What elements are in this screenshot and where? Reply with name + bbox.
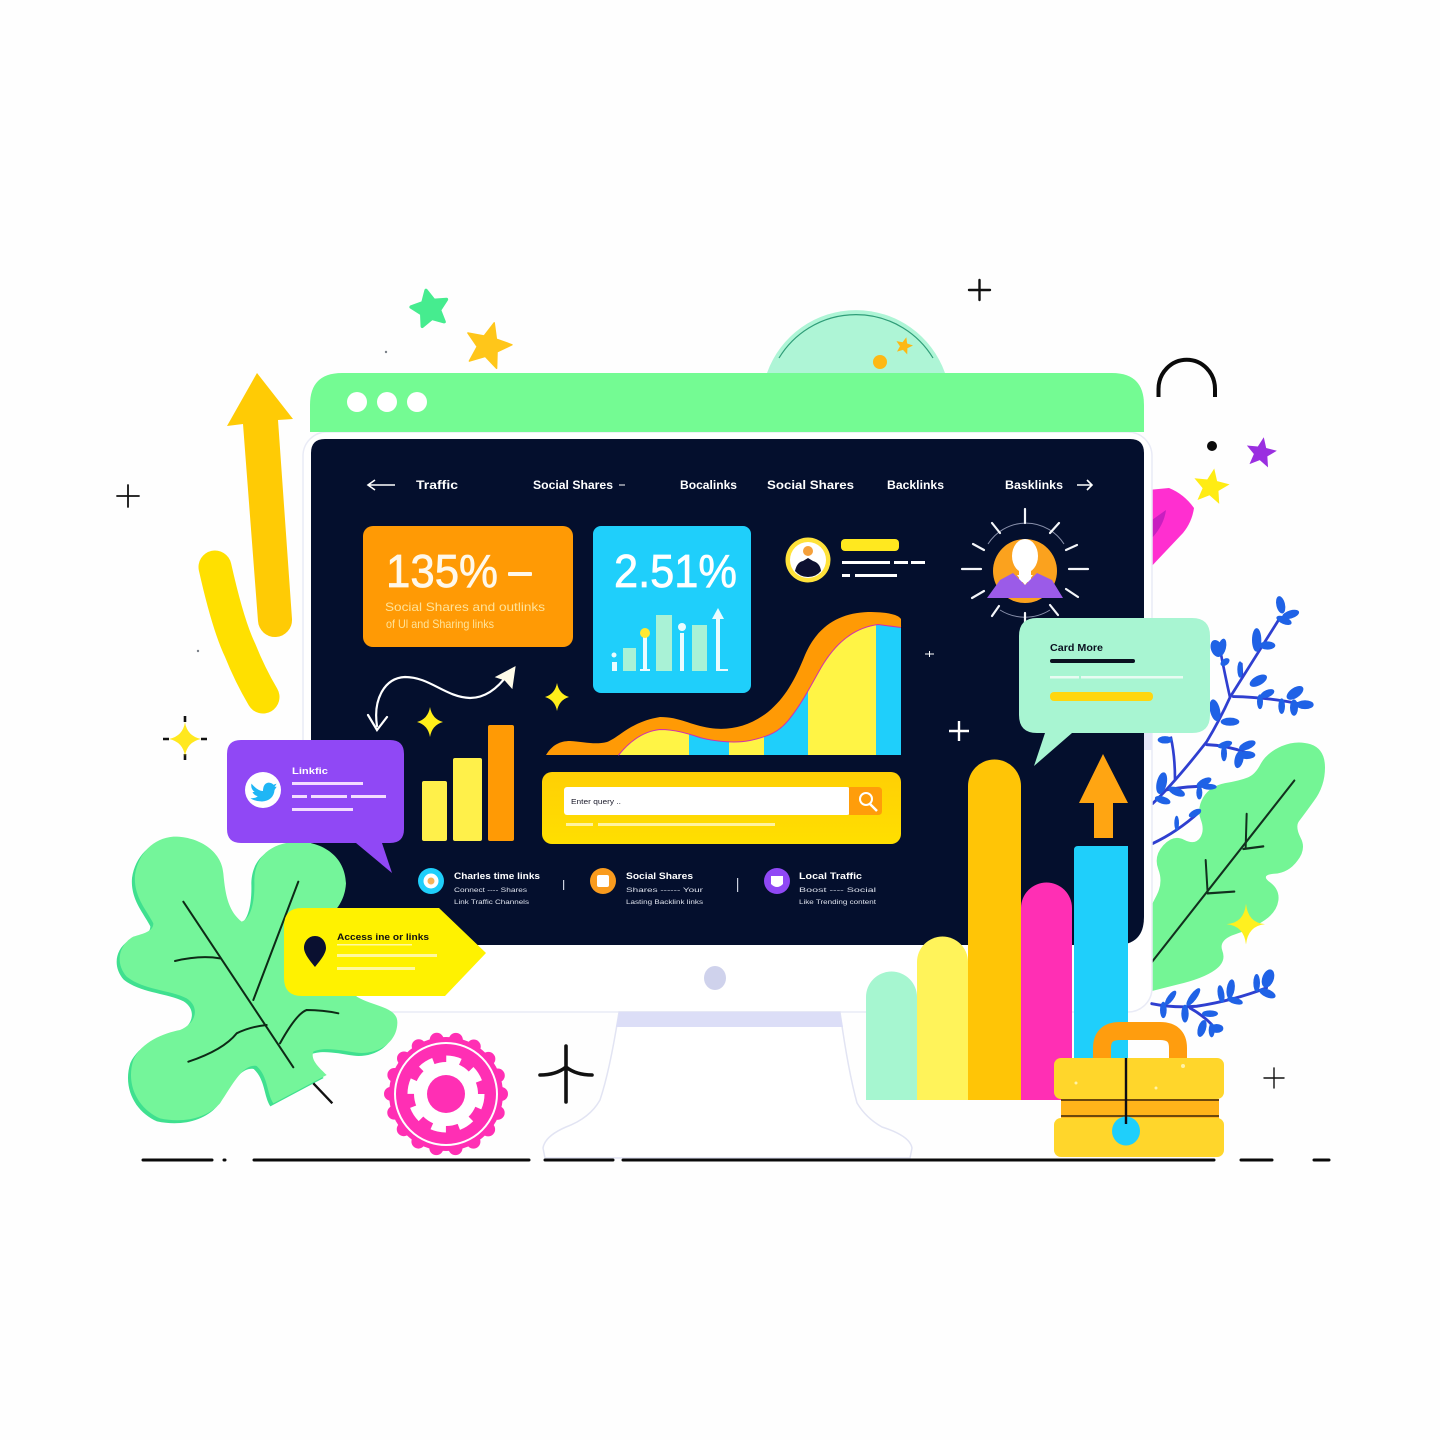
speech bubble: card more: Card More [1050, 643, 1103, 654]
orange up arrow [1079, 754, 1128, 838]
black arc [1158, 360, 1215, 397]
navigation row: Social Shares [533, 478, 613, 492]
monitor stand [543, 1012, 912, 1158]
navigation row: Social Shares [767, 478, 854, 492]
navigation row: Bocalinks [680, 478, 737, 492]
search bar panel: Enter query .. [571, 799, 621, 806]
infographic: monitor dashboard illustration [116, 278, 1330, 1162]
stat: charts and links [418, 868, 540, 906]
sparkle with black cross [163, 716, 207, 762]
orange stat card [363, 526, 573, 647]
purple speech bubble: twitter: Linkfic [292, 766, 328, 776]
area chart [546, 600, 901, 755]
icon: map pin [304, 936, 326, 967]
stat: local traffic: Like Trending content [799, 899, 876, 906]
ground line [143, 1158, 1329, 1162]
navigation row: Backlinks [887, 478, 944, 492]
swirling arrow [368, 667, 515, 730]
decorative magenta shape [1148, 488, 1194, 570]
yellow star right [1193, 467, 1230, 503]
navigation row: Basklinks [1005, 478, 1063, 492]
orange stat card: of Ul and Sharing links [386, 617, 494, 631]
stat: local traffic [764, 868, 877, 906]
purple star [1244, 435, 1279, 468]
bottom stats row [418, 868, 877, 906]
stat: social shares: Social Shares [626, 871, 693, 882]
sun person icon [962, 509, 1088, 623]
left green leaf [117, 837, 397, 1123]
yellow tag: access links [284, 908, 486, 996]
monitor power button [704, 966, 726, 990]
stat: local traffic: Local Traffic [799, 871, 862, 882]
yellow tag: access links: Access ine or links [337, 932, 429, 943]
right leaf with branches [1150, 595, 1325, 1038]
plus marks [117, 280, 1284, 1102]
green star [408, 287, 451, 328]
search bar panel [542, 772, 901, 844]
amber star [461, 317, 516, 371]
cyan stat card with mini bar chart: 2.51% [614, 545, 737, 597]
monitor body [303, 432, 1152, 1158]
orange stat card: 135% [386, 545, 498, 597]
yellow stroke [215, 567, 263, 697]
speech bubble: card more [1019, 618, 1210, 766]
stat: social shares [590, 868, 704, 906]
small edge detail [1144, 733, 1152, 750]
yellow toolbox [1054, 1031, 1224, 1157]
orange stat card: Social Shares and outlinks [385, 600, 545, 614]
avatar profile row [786, 538, 925, 582]
decorative dome behind monitor [767, 310, 945, 373]
yellow sparkles on screen [417, 683, 569, 737]
stat: charts and links: Charles time links [454, 871, 540, 882]
dark dashboard screen [311, 439, 1144, 945]
black dot [1207, 441, 1217, 451]
browser header bar [310, 373, 1144, 432]
navigation row [368, 478, 1092, 492]
stat: social shares: Shares ------ Your [626, 887, 704, 894]
yellow curved arrow [227, 373, 293, 637]
stat: local traffic: Boost ---- Social [799, 887, 877, 894]
icon: twitter bird [250, 783, 277, 802]
stat: social shares: Lasting Backlink links [626, 899, 704, 906]
screen plus and sparkle [925, 651, 969, 741]
colorful rounded bars [866, 760, 1128, 1100]
stat: charts and links: Link Traffic Channels [454, 899, 530, 906]
small bar chart [422, 725, 514, 841]
navigation row: Traffic [416, 478, 458, 492]
stat: charts and links: Connect ---- Shares [454, 887, 528, 894]
cyan stat card with mini bar chart [593, 526, 751, 693]
tiny dots [197, 351, 387, 652]
purple speech bubble: twitter [227, 740, 404, 873]
gear badge [389, 1037, 503, 1151]
